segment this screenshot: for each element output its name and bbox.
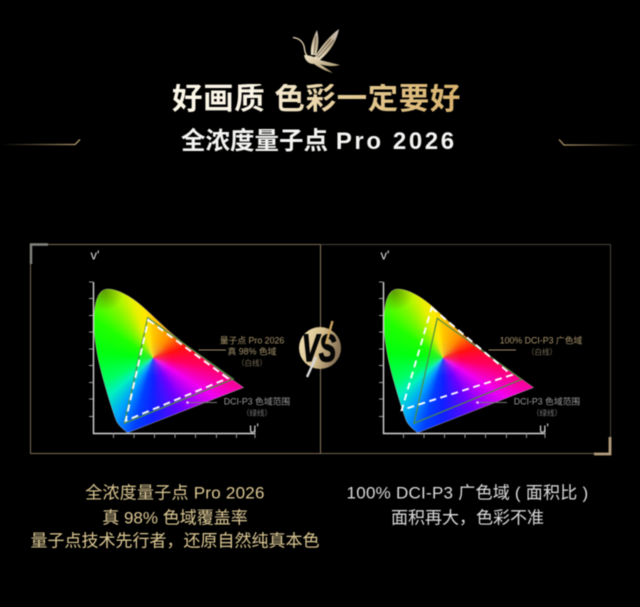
caption line 1: 全浓度量子点 Pro 2026	[85, 484, 265, 502]
gamut colour area	[380, 285, 540, 435]
chart: right colour gamut	[378, 248, 582, 438]
axis label u: u'	[249, 420, 259, 436]
callout: true 98 percent: 真 98% 色域	[228, 347, 276, 357]
panel: left comparison frame	[30, 244, 321, 454]
axis label v: v'	[380, 248, 389, 262]
axis label u: u'	[539, 420, 549, 436]
icon: golden crane	[292, 28, 340, 74]
title: main heading: 好画质 色彩一定要好	[172, 82, 461, 116]
decorative gold rules	[6, 138, 634, 146]
caption line 1: 100% DCI-P3 广色域 ( 面积比 )	[347, 484, 588, 502]
axes and triangles	[378, 280, 546, 438]
subtitle: 全浓度量子点 Pro 2026	[181, 128, 457, 155]
gamut colour area	[90, 285, 250, 435]
callout: green line note: （绿线）	[532, 408, 562, 417]
axes and triangles	[88, 280, 256, 438]
icon: VS badge: VS	[302, 328, 336, 370]
text block: right caption	[347, 483, 588, 527]
text block: left caption	[30, 483, 320, 550]
chart: left colour gamut	[88, 248, 290, 438]
callout: white line note: （白线）	[237, 358, 267, 367]
callout: DCI-P3 range: DCI-P3 色域范围	[514, 396, 580, 406]
callout: white line note: （白线）	[527, 347, 557, 356]
callout: quantum dot gamut: 量子点 Pro 2026	[220, 335, 284, 345]
caption line 2: 真 98% 色域覆盖率	[102, 508, 248, 527]
caption line 2: 面积再大，色彩不准	[391, 508, 544, 527]
callout: 100 percent DCI-P3: 100% DCI-P3 广色域	[500, 336, 582, 346]
caption line 3: 量子点技术先行者，还原自然纯真本色	[30, 531, 320, 550]
axis label v: v'	[90, 248, 99, 262]
callout: DCI-P3 range: DCI-P3 色域范围	[224, 396, 290, 406]
callout: green line note: （绿线）	[242, 408, 272, 417]
panel: right comparison frame	[320, 244, 611, 454]
